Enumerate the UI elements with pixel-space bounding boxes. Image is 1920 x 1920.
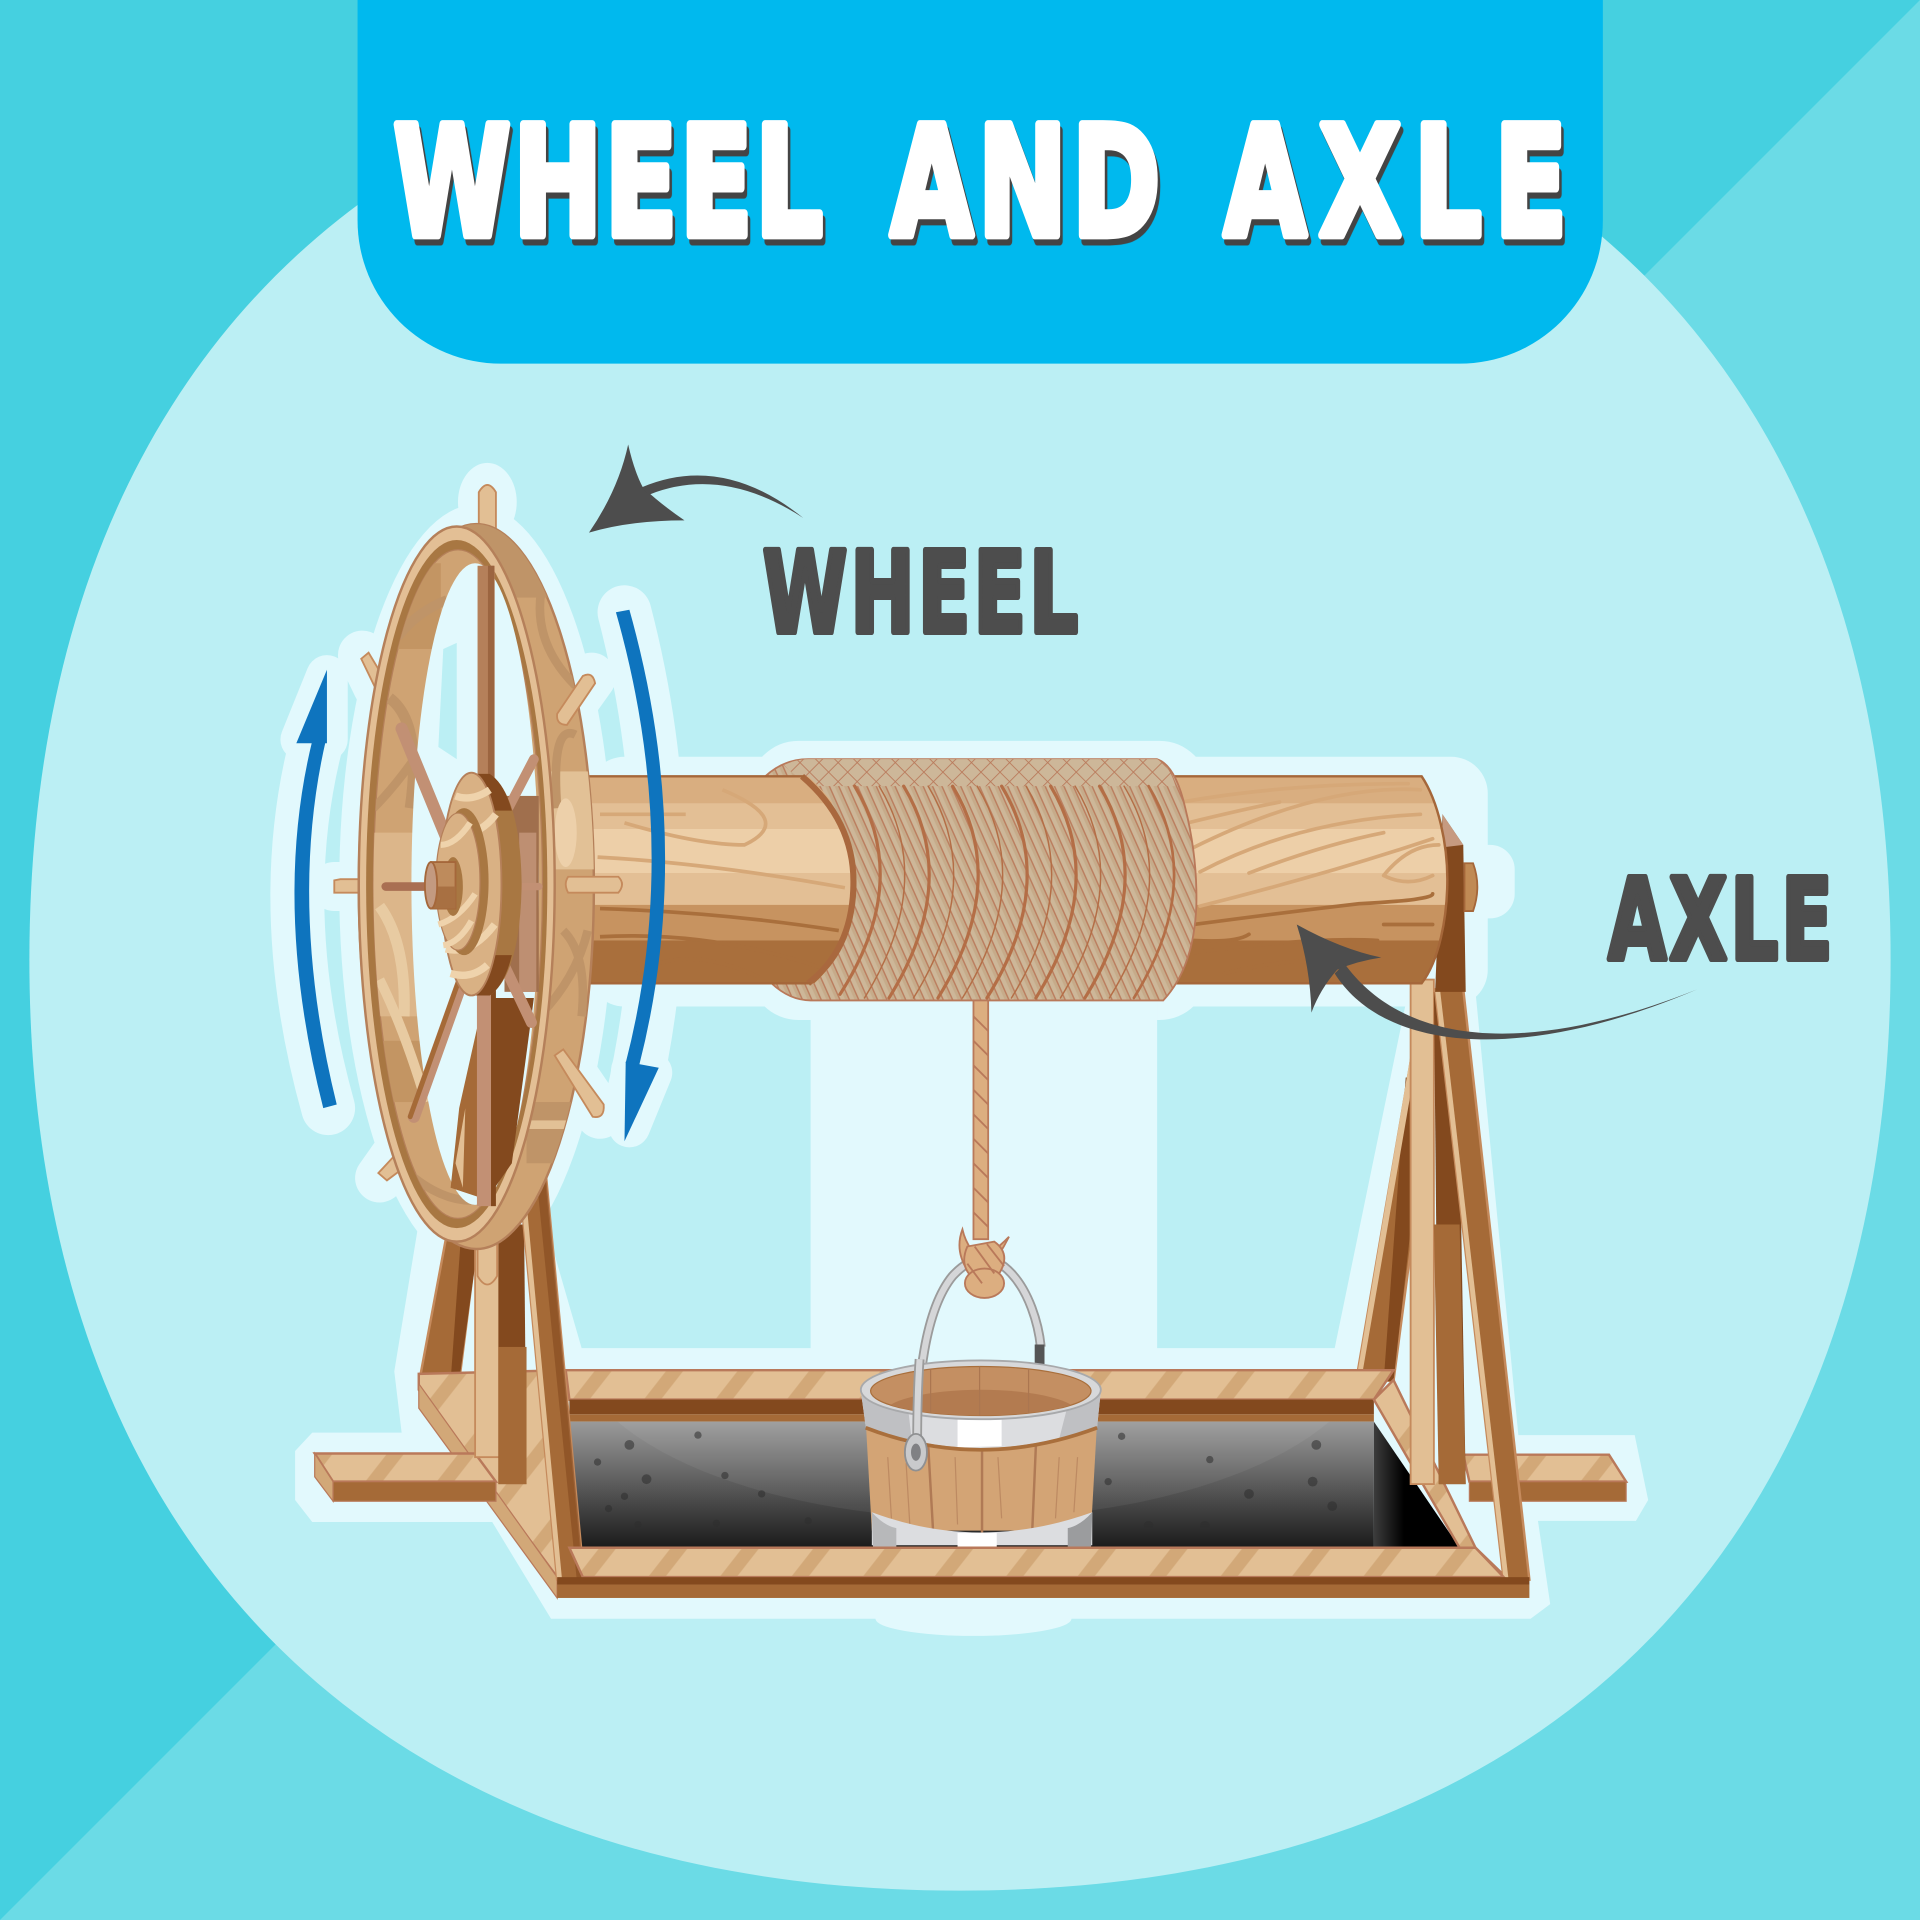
front rim: [359, 527, 555, 1242]
wheel pointer arrow: [589, 444, 803, 533]
center bolt: [425, 862, 456, 909]
axle label: AXLE: [1608, 854, 1836, 986]
opening gaps: [438, 643, 457, 759]
front board: [557, 1548, 1529, 1598]
right posts: [1411, 814, 1529, 1580]
axle right section: [1174, 775, 1448, 984]
back board edge: [569, 1400, 1374, 1422]
well pit: [570, 1422, 1458, 1546]
axle pointer arrow: [1297, 924, 1697, 1039]
right pegs: [555, 675, 622, 1117]
title: WHEEL: [393, 94, 825, 271]
rope coil on axle: [765, 759, 1196, 1000]
outer rim: [355, 524, 600, 1249]
left foot board: [315, 1453, 496, 1501]
rotation arrow left: [294, 670, 337, 1108]
wheel label: WHEEL: [763, 528, 1081, 659]
left side board: [419, 1370, 584, 1580]
bucket handle: [917, 1259, 1041, 1445]
back board: [566, 1370, 1393, 1400]
title: AXLE: [1224, 94, 1580, 271]
rim shadow ring: [366, 540, 547, 1228]
bucket: [861, 1359, 1101, 1548]
right rear braces: [1357, 1041, 1430, 1381]
well frame and base: [315, 814, 1626, 1598]
left rear brace: [420, 1102, 490, 1381]
stand seen through opening: [451, 796, 539, 1198]
rim inner band: [367, 550, 542, 1218]
bottom metal band: [872, 1512, 1092, 1548]
axle end pin: [1464, 863, 1477, 911]
top peg: [479, 485, 496, 529]
title banner: [358, 0, 1603, 364]
rope knot: [959, 1229, 1009, 1298]
wheel opening: [411, 563, 539, 1205]
rotation arrow right: [616, 610, 665, 1141]
hub: [436, 773, 522, 996]
bucket opening: [860, 1360, 1102, 1420]
axle left section: [588, 776, 853, 983]
spokes: [386, 566, 539, 1206]
pulley wheel: [334, 485, 622, 1284]
rim metal band: [861, 1391, 1101, 1450]
sticker outline halo: [295, 463, 1648, 1636]
bottom peg: [478, 1243, 497, 1284]
right foot board: [1463, 1455, 1626, 1501]
right side board: [1374, 1380, 1509, 1580]
title: AND: [891, 94, 1165, 271]
hanging rope: [973, 1000, 988, 1239]
wood staves: [866, 1420, 1097, 1533]
handle front lug: [905, 1359, 927, 1471]
left pegs: [334, 653, 402, 1180]
left posts: [475, 1151, 584, 1580]
